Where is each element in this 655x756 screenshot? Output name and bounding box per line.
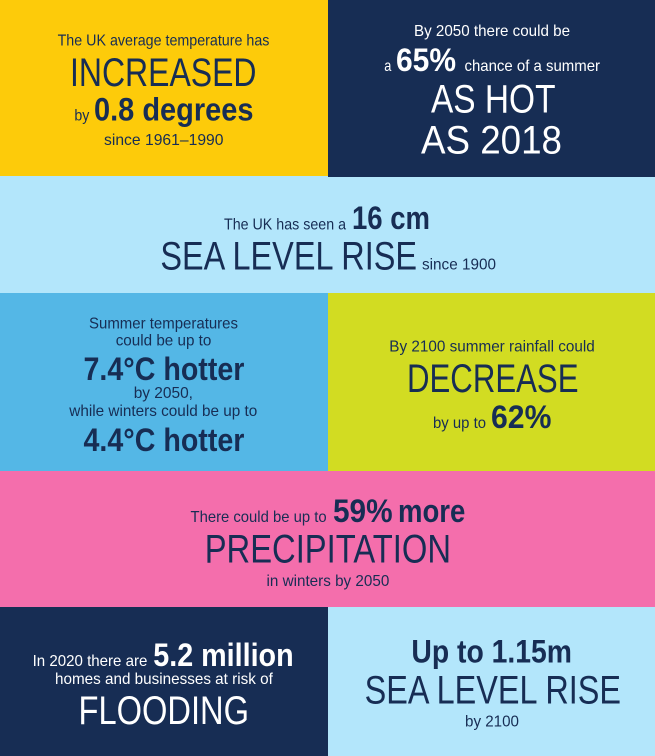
panel: summer rainfall decrease: [328, 293, 655, 471]
stat: 0.8 degrees: 0.8 degrees: [94, 92, 254, 128]
intro text: By 2100 summer rainfall could: [389, 338, 595, 355]
intro text: There could be up to: [190, 509, 327, 526]
panel: flood risk: [0, 607, 328, 756]
intro text: The UK has seen a: [224, 216, 346, 233]
period text: by 2100: [465, 714, 519, 731]
intro text: In 2020 there are: [33, 653, 147, 670]
stat: 7.4°C hotter: 7.4°C hotter: [84, 351, 244, 387]
heading: as hot: AS HOT: [431, 78, 556, 122]
panel: hot summer chance: [328, 0, 655, 177]
label: chance of a summer: chance of a summer: [464, 58, 601, 75]
heading: decrease: DECREASE: [407, 357, 578, 401]
heading: precipitation: PRECIPITATION: [205, 528, 451, 572]
panel: hotter summers and winters: [0, 293, 328, 471]
period text: since 1900: [422, 256, 496, 273]
intro text: By 2050 there could be: [414, 23, 570, 40]
stat: 4.4°C hotter: 4.4°C hotter: [84, 422, 244, 458]
label: by: by: [74, 108, 89, 125]
heading: increased: INCREASED: [70, 51, 256, 95]
panel: sea level rise since 1900: [0, 176, 655, 293]
heading: flooding: FLOODING: [78, 689, 249, 733]
stat: 5.2 million: 5.2 million: [153, 637, 294, 673]
period text: since 1961–1990: [104, 132, 224, 149]
text: while winters: while winters could be up to: [68, 403, 257, 420]
stat: more: more: [398, 493, 465, 529]
label: a: a: [384, 58, 391, 75]
panel: UK temperature increase: [0, 0, 328, 176]
text: summer temperatures: Summer temperatures: [89, 315, 238, 332]
heading: as 2018: AS 2018: [421, 118, 562, 162]
text: homes and businesses: homes and businesses at risk of: [55, 671, 273, 688]
stat: up to 1.15m: Up to 1.15m: [411, 634, 572, 670]
stat: 59%: 59%: [333, 493, 393, 529]
label: by up to: by up to: [433, 415, 486, 432]
stat: 16 cm: 16 cm: [352, 200, 430, 236]
panel: sea level rise by 2100: [328, 607, 655, 756]
text: by 2050: by 2050,: [134, 385, 193, 402]
stat: 65%: 65%: [396, 42, 456, 78]
text: could be up to: could be up to: [116, 332, 211, 349]
heading: sea level rise: SEA LEVEL RISE: [160, 234, 417, 278]
period text: in winters by 2050: [266, 573, 389, 590]
stat: 62%: 62%: [491, 399, 551, 435]
panel: winter precipitation: [0, 471, 655, 607]
intro text: The UK average temperature has: [58, 32, 269, 49]
